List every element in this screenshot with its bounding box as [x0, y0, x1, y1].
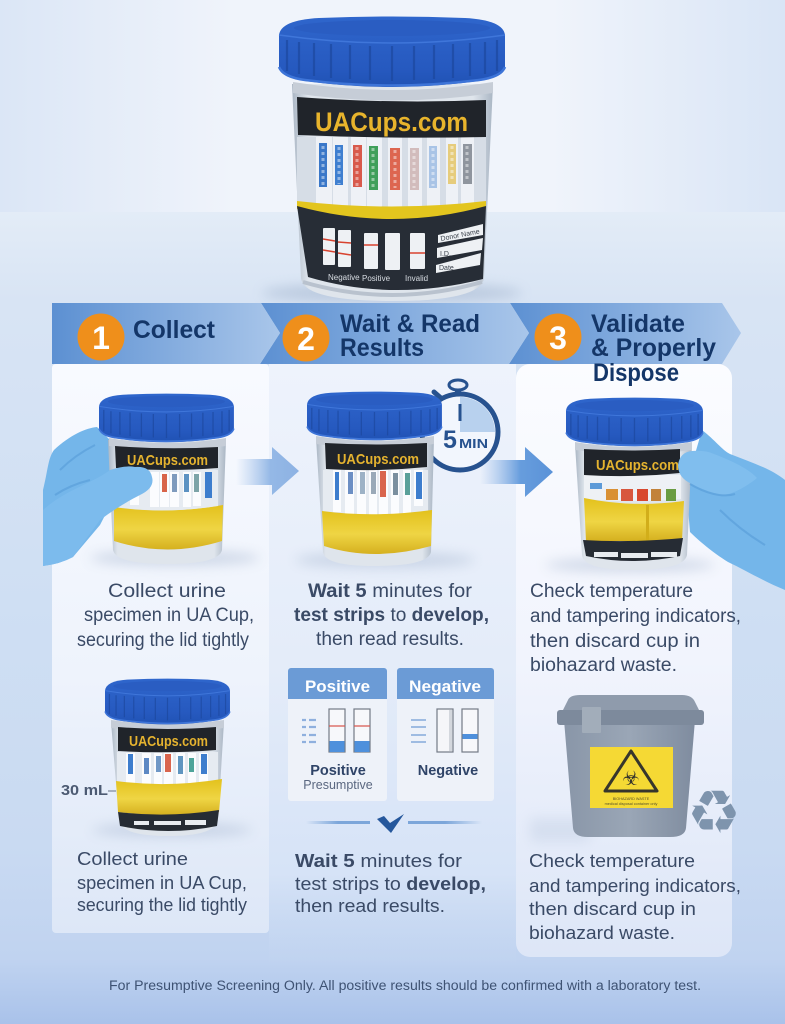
- text: wait 5 minutes: [294, 581, 489, 650]
- text: check temperature repeat: Check temperature: [529, 850, 695, 871]
- stopwatch 5 min: [422, 380, 498, 470]
- panel: column 1: [52, 364, 269, 933]
- hero dark label band: UACups.com: [315, 107, 468, 137]
- cup: waiting: [295, 392, 475, 568]
- glove back of hand: [43, 427, 118, 566]
- arrow: step 1 to 2: [236, 447, 299, 495]
- hero lower result panel: [297, 206, 486, 290]
- banner segment 3: 3: [549, 320, 567, 356]
- text: check temperature: Check temperature: [530, 581, 693, 602]
- hero lower result panel: Positive: [362, 274, 391, 283]
- text: check temperature: [530, 581, 741, 676]
- text: wait 5 minutes: test strips to develop,: [294, 605, 489, 626]
- divider with check mark: [306, 814, 482, 833]
- text: check temperature: biohazard waste.: [530, 655, 677, 676]
- banner segment 3: Validate: [591, 310, 685, 338]
- banner segment 2: Wait & Read: [340, 310, 480, 338]
- stopwatch 5 min: MIN: [459, 437, 488, 451]
- footer disclaimer: For Presumptive Screening Only. All positive results should be confirmed with a laboratory test.: [109, 978, 701, 993]
- banner segment 3: & Properly: [591, 334, 716, 362]
- hero lower result panel: I.D.: [440, 251, 451, 258]
- text: check temperature: and tampering indicators,: [530, 606, 741, 627]
- hero lower result panel: Donor Name: [440, 228, 480, 243]
- card: positive: Positive: [310, 763, 366, 779]
- text: check temperature repeat: and tampering indicators,: [529, 875, 741, 896]
- text: collect: specimen in UA Cup,: [84, 605, 254, 626]
- icon: recycle: ♻: [687, 778, 741, 848]
- cup: validate, held by gloved hand: UACups.com: [596, 457, 679, 474]
- banner segment 2: Results: [340, 334, 424, 362]
- hero dark label band: [297, 97, 486, 138]
- text: collect: securing the lid tightly: [77, 630, 249, 651]
- text: check temperature repeat: [529, 850, 741, 943]
- glove thumb: [43, 466, 152, 566]
- card: negative: [397, 668, 494, 801]
- hero urine level: [297, 201, 486, 220]
- hero test strips: [316, 137, 474, 223]
- panel: column 3: [516, 364, 732, 957]
- text: wait 5 minutes repeat: test strips to develop,: [295, 873, 486, 894]
- text: wait 5 minutes repeat: [295, 850, 486, 916]
- glove right hand: [686, 430, 785, 590]
- banner segment 1: Collect: [133, 316, 216, 344]
- text: check temperature repeat: then discard cup in: [529, 898, 696, 919]
- cup: waiting: UACups.com: [337, 451, 419, 468]
- text: check temperature repeat: biohazard waste.: [529, 922, 675, 943]
- banner segment 3: [509, 303, 741, 387]
- banner segment 2: 2: [297, 321, 315, 357]
- text: collect repeat: Collect urine: [77, 848, 188, 869]
- biohazard label: BIOHAZARD WASTE: [613, 797, 650, 801]
- biohazard label: [590, 747, 673, 808]
- text: check temperature: then discard cup in: [530, 631, 700, 652]
- stopwatch 5 min: 5: [443, 426, 457, 454]
- arrow: step 2 to 3: [480, 447, 553, 497]
- text: collect repeat: specimen in UA Cup,: [77, 872, 247, 893]
- step banner: [52, 303, 741, 387]
- panel: column 2: [269, 364, 516, 964]
- text: wait 5 minutes: Wait 5 minutes for: [308, 581, 473, 602]
- card: positive: Presumptive: [303, 778, 373, 792]
- banner segment 1: [52, 303, 280, 364]
- biohazard label: ☣: [622, 766, 640, 790]
- text: wait 5 minutes: then read results.: [316, 629, 464, 650]
- cup: collect, held by gloved hand: UACups.com: [127, 452, 208, 469]
- hero lower result panel: Date: [439, 265, 454, 272]
- card: positive: [288, 668, 387, 801]
- text: wait 5 minutes repeat: then read results.: [295, 895, 445, 916]
- banner segment 1: 1: [92, 320, 110, 356]
- card: negative: Negative: [418, 763, 478, 779]
- text: wait 5 minutes repeat: Wait 5 minutes for: [295, 850, 462, 871]
- text: collect: [77, 581, 254, 651]
- cup: validate, held by gloved hand: [545, 398, 785, 590]
- 30 mL label: 30 mL: [61, 782, 108, 799]
- cup: 30 mL fill level: [61, 679, 252, 837]
- card: negative: Negative: [409, 677, 481, 696]
- card: positive: Positive: [305, 677, 370, 696]
- text: collect: Collect urine: [108, 581, 226, 602]
- biohazard label: medical disposal container only: [605, 802, 657, 806]
- hero lower result panel: Invalid: [405, 274, 428, 283]
- cup: 30 mL fill level: UACups.com: [129, 734, 208, 750]
- banner segment 2: [260, 303, 529, 364]
- cup: collect, held by gloved hand: [43, 394, 260, 566]
- glove thumb: [678, 451, 757, 495]
- hero lower result panel: Negative: [328, 273, 360, 282]
- banner segment 3: Dispose: [593, 359, 679, 387]
- text: collect repeat: securing the lid tightly: [77, 894, 248, 915]
- hero product cup: [262, 16, 522, 303]
- biohazard bin: [530, 695, 741, 848]
- text: collect repeat: [77, 848, 248, 915]
